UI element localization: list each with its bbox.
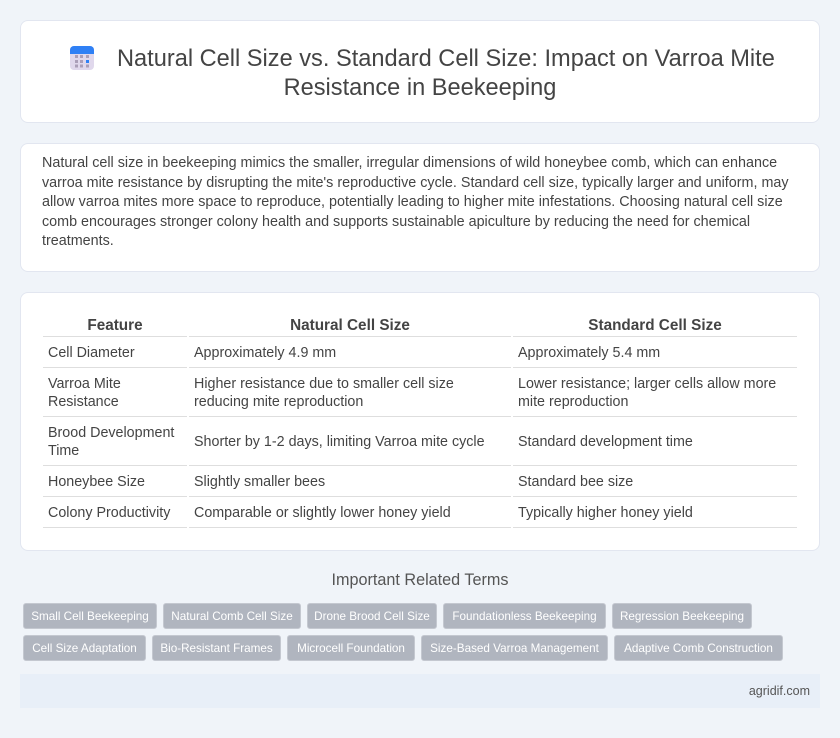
intro paragraph: varroa mite resistance by disrupting the mite's reproductive cycle. Standard cell size, typically larger and uniform, may xyxy=(42,174,789,190)
title: Resistance in Beekeeping xyxy=(284,75,556,101)
icon: calendar xyxy=(70,46,94,70)
tag: Small Cell Beekeeping xyxy=(31,610,149,623)
tag xyxy=(421,635,608,661)
tag xyxy=(163,603,301,629)
tag: Natural Comb Cell Size xyxy=(171,610,293,623)
tag: Microcell Foundation xyxy=(297,642,405,655)
standard: varroa mite resistance xyxy=(518,376,776,410)
footer bar xyxy=(20,674,820,708)
table header: standard cell size: Standard Cell Size xyxy=(588,317,722,334)
tag: Cell Size Adaptation xyxy=(32,642,137,655)
standard: varroa mite resistance: Lower resistance; larger cells allow more xyxy=(518,376,776,392)
row: honeybee size: Honeybee Size xyxy=(48,474,145,490)
row: colony productivity: Colony Productivity xyxy=(48,505,170,521)
panel: intro text xyxy=(20,143,820,272)
title: Natural Cell Size vs. Standard Cell Size: Impact on Varroa Mite xyxy=(117,46,775,72)
tag xyxy=(443,603,606,629)
tag xyxy=(23,635,146,661)
tag xyxy=(614,635,783,661)
tag xyxy=(307,603,437,629)
standard: brood development time: Standard development time xyxy=(518,434,693,450)
tag xyxy=(612,603,752,629)
table header: natural cell size: Natural Cell Size xyxy=(290,317,410,334)
intro paragraph: allow varroa mites more space to reproduce, potentially leading to higher mite infestations. Choosing natural cell size xyxy=(42,194,783,210)
title card xyxy=(20,20,820,123)
natural: cell diameter: Approximately 4.9 mm xyxy=(194,345,336,361)
tag: Size-Based Varroa Management xyxy=(430,642,599,655)
natural: varroa mite resistance: reducing mite reproduction xyxy=(194,394,363,410)
table header: feature: Feature xyxy=(87,317,143,334)
row: brood development time: Time xyxy=(48,443,79,459)
row: varroa mite resistance: Varroa Mite xyxy=(48,376,121,392)
intro paragraph: treatments. xyxy=(42,233,114,249)
intro paragraph: comb encourages stronger colony health and supports sustainable apiculture by reducing the need for chemical xyxy=(42,214,750,230)
tag: Adaptive Comb Construction xyxy=(624,642,773,655)
row: brood development time: Brood Development xyxy=(48,425,174,441)
natural: honeybee size: Slightly smaller bees xyxy=(194,474,325,490)
tag: Foundationless Beekeeping xyxy=(452,610,597,623)
standard: cell diameter: Approximately 5.4 mm xyxy=(518,345,660,361)
footer source: agridif.com xyxy=(749,684,810,698)
natural: brood development time: Shorter by 1-2 days, limiting Varroa mite cycle xyxy=(194,434,485,450)
row: varroa mite resistance: Resistance xyxy=(48,394,119,410)
tag xyxy=(23,603,157,629)
tag: Bio-Resistant Frames xyxy=(160,642,273,655)
title xyxy=(117,46,775,101)
intro paragraph xyxy=(42,155,789,249)
row: varroa mite resistance xyxy=(48,376,121,410)
natural: colony productivity: Comparable or slightly lower honey yield xyxy=(194,505,451,521)
standard: colony productivity: Typically higher honey yield xyxy=(518,505,693,521)
tag xyxy=(287,635,415,661)
row: cell diameter: Cell Diameter xyxy=(48,345,135,361)
tag: Regression Beekeeping xyxy=(620,610,744,623)
standard: honeybee size: Standard bee size xyxy=(518,474,633,490)
tag: Drone Brood Cell Size xyxy=(314,610,430,623)
standard: varroa mite resistance: mite reproduction xyxy=(518,394,628,410)
panel: comparison table xyxy=(20,292,820,551)
natural: varroa mite resistance xyxy=(194,376,454,410)
heading: related terms: Important Related Terms xyxy=(332,571,508,589)
intro paragraph: Natural cell size in beekeeping mimics the smaller, irregular dimensions of wild honeybee comb, which can enhance xyxy=(42,155,777,171)
tag xyxy=(152,635,281,661)
natural: varroa mite resistance: Higher resistance due to smaller cell size xyxy=(194,376,454,392)
row: brood development time xyxy=(48,425,174,459)
